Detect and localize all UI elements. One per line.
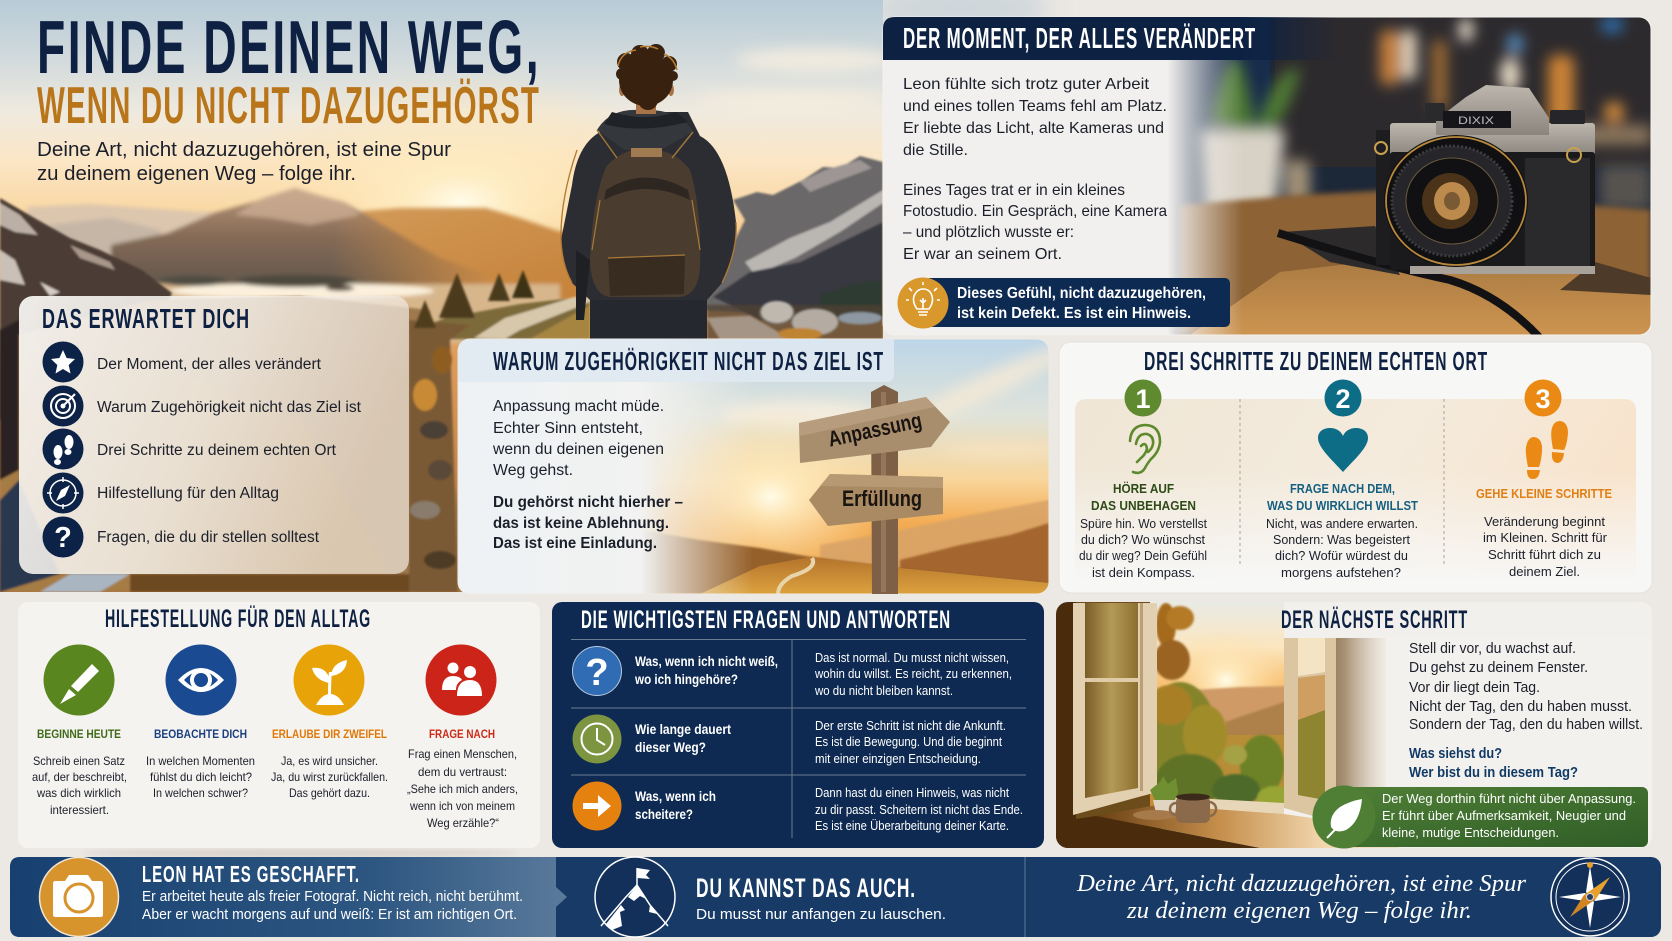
- story text: – und plötzlich wusste er:: [903, 224, 1074, 241]
- body text: [1409, 640, 1643, 781]
- step background: [1075, 399, 1636, 580]
- subtitle: Deine Art, nicht dazuzugehören, ist eine Spur: [37, 138, 451, 161]
- question 1: ?: [585, 652, 609, 694]
- question 1: Das ist normal. Du musst nicht wissen,: [815, 651, 1009, 665]
- panel: der nächste Schritt: [1056, 602, 1652, 848]
- title: WENN DU NICHT DAZUGEHÖRST: [37, 77, 540, 135]
- body text: Du gehörst nicht hierher –: [493, 494, 683, 511]
- tip: beginne heute: BEGINNE HEUTE: [37, 729, 121, 741]
- body text: [492, 398, 683, 552]
- callout: Der Weg dorthin führt nicht über Anpassung.: [1382, 792, 1636, 806]
- callout: Er führt über Aufmerksamkeit, Neugier und: [1382, 809, 1626, 823]
- callout: [1312, 786, 1648, 848]
- icon: mountain with flag: [601, 868, 668, 930]
- footer: Leon hat es geschafft: Er arbeitet heute als freier Fotograf. Nicht reich, nicht berühmt.: [142, 889, 523, 905]
- body text: Das ist eine Einladung.: [493, 535, 657, 552]
- subtitle: [37, 138, 451, 185]
- body text: Stell dir vor, du wachst auf.: [1409, 640, 1576, 657]
- step 3: GEHE KLEINE SCHRITTE: [1476, 486, 1612, 501]
- body text: wenn du deinen eigenen: [492, 441, 664, 458]
- story text: [903, 76, 1167, 263]
- step 3: [1476, 380, 1612, 579]
- question 3: scheitere?: [635, 806, 693, 822]
- body text: Anpassung macht müde.: [493, 398, 664, 415]
- icon: compass: [1551, 858, 1629, 936]
- hiker figure: [561, 44, 736, 339]
- window photo: [1056, 602, 1410, 848]
- panel: Hilfestellung für den Alltag: [18, 602, 540, 848]
- list item: Fragen: Fragen, die du dir stellen solltest: [97, 529, 320, 546]
- heading: DIE WICHTIGSTEN FRAGEN UND ANTWORTEN: [581, 606, 951, 634]
- step 1: HÖRE AUF: [1113, 481, 1174, 496]
- left sash: [1073, 603, 1157, 815]
- step 1: DAS UNBEHAGEN: [1091, 498, 1196, 513]
- signpost: Erfüllung: [842, 486, 922, 511]
- callout: ist kein Defekt. Es ist ein Hinweis.: [957, 305, 1191, 322]
- footer: du kannst das auch: Du musst nur anfangen zu lauschen.: [696, 906, 946, 923]
- tip: frage nach: FRAGE NACH: [429, 729, 495, 741]
- icon: footprints: [1526, 421, 1568, 479]
- header band: [458, 339, 894, 382]
- question 1: wo ich hingehöre?: [634, 671, 738, 687]
- tip: beginne heute: Schreib einen Satz: [33, 754, 125, 768]
- step 1: du dir weg? Dein Gefühl: [1079, 548, 1207, 563]
- heading: DER NÄCHSTE SCHRITT: [1281, 606, 1468, 634]
- tip: beobachte dich: [146, 644, 255, 800]
- tip: erlaube dir zweifel: Ja, es wird unsicher.: [281, 754, 378, 768]
- list item: Hilfestellung: [42, 472, 279, 514]
- question 3: Dann hast du einen Hinweis, was nicht: [815, 786, 1009, 800]
- list item: der Moment: Der Moment, der alles verändert: [97, 356, 322, 373]
- tip: frage nach: Frag einen Menschen,: [408, 747, 517, 761]
- tip: beobachte dich: BEOBACHTE DICH: [154, 729, 247, 741]
- list item: Zugehörigkeit: Warum Zugehörigkeit nicht das Ziel ist: [97, 399, 362, 416]
- story text: und eines tollen Teams fehl am Platz.: [903, 98, 1167, 115]
- body text: Wer bist du in diesem Tag?: [1409, 764, 1578, 781]
- footer: du kannst das auch: DU KANNST DAS AUCH.: [696, 873, 916, 903]
- step 3: Schritt führt dich zu: [1488, 547, 1601, 562]
- story text: die Stille.: [903, 142, 968, 159]
- panel: warum Zugehörigkeit nicht das Ziel ist: [458, 336, 1077, 594]
- camera: DIXIX: [1458, 115, 1495, 127]
- body text: Vor dir liegt dein Tag.: [1409, 679, 1540, 696]
- header band: [883, 17, 1340, 60]
- tip: erlaube dir zweifel: Das gehört dazu.: [289, 786, 370, 800]
- icon: two people: [442, 662, 482, 696]
- list item: drei Schritte: [42, 428, 337, 470]
- icon: pencil: [60, 664, 99, 704]
- icon: arrow: [583, 795, 611, 817]
- callout: Dieses Gefühl, nicht dazuzugehören,: [957, 285, 1206, 302]
- step 2: Sondern: Was begeistert: [1273, 532, 1410, 547]
- footer bar: [10, 857, 1661, 937]
- right sash: [1336, 638, 1386, 803]
- tip: frage nach: wenn ich von meinem: [409, 799, 515, 813]
- body text: Echter Sinn entsteht,: [493, 420, 643, 437]
- icon: leaf: [1327, 799, 1362, 838]
- story text: Fotostudio. Ein Gespräch, eine Kamera: [903, 203, 1167, 220]
- question 1: wo du nicht bleiben kannst.: [814, 684, 953, 698]
- step 2: morgens aufstehen?: [1281, 565, 1401, 580]
- callout: [898, 278, 1230, 328]
- body text: Sondern der Tag, den du haben willst.: [1409, 716, 1643, 733]
- question 2: Es ist die Bewegung. Und die beginnt: [815, 735, 1002, 749]
- tip: frage nach: „Sehe ich mich anders,: [407, 782, 518, 796]
- tip: beobachte dich: In welchen schwer?: [153, 786, 248, 800]
- tip: beginne heute: was dich wirklich: [36, 786, 121, 800]
- panel: der Moment, der alles verändert: [883, 17, 1651, 338]
- question 1: [572, 646, 1012, 698]
- list item: Fragen: ?: [54, 522, 72, 554]
- heading: DER MOMENT, DER ALLES VERÄNDERT: [903, 22, 1256, 55]
- step 3: deinem Ziel.: [1509, 564, 1580, 579]
- question 3: zu dir passt. Scheitern ist nicht das Ende.: [815, 803, 1023, 817]
- footer: du kannst das auch: [595, 857, 946, 937]
- icon: sprout: [312, 660, 347, 705]
- tip: beginne heute: [32, 644, 127, 817]
- icon: heart: [1318, 428, 1368, 472]
- question 2: Wie lange dauert: [635, 721, 731, 737]
- callout: kleine, mutige Entscheidungen.: [1382, 826, 1559, 840]
- hair: [616, 44, 678, 110]
- step 3: im Kleinen. Schritt für: [1483, 530, 1608, 545]
- question 3: [572, 782, 1023, 833]
- body text: Weg gehst.: [493, 462, 573, 479]
- camera photo: [883, 17, 1651, 338]
- list item: drei Schritte: Drei Schritte zu deinem echten Ort: [97, 442, 337, 459]
- icon: camera: [53, 875, 103, 917]
- icon: eye: [178, 668, 224, 692]
- tip: beobachte dich: fühlst du dich leicht?: [150, 770, 252, 784]
- title: [37, 5, 541, 135]
- tip: beginne heute: interessiert.: [50, 803, 109, 817]
- tip: frage nach: [407, 644, 518, 830]
- tip: frage nach: Weg erzähle?“: [427, 816, 499, 830]
- question 2: mit einer einzigen Entscheidung.: [815, 752, 981, 766]
- list item: Fragen: [42, 516, 320, 558]
- step 3: Veränderung beginnt: [1484, 514, 1605, 529]
- body text: Was siehst du?: [1409, 745, 1502, 762]
- subtitle: zu deinem eigenen Weg – folge ihr.: [37, 162, 356, 185]
- question 2: dieser Weg?: [635, 739, 706, 755]
- panel: das erwartet dich: [19, 296, 409, 574]
- icon: ear: [1130, 425, 1160, 473]
- signpost photo: [458, 336, 1077, 594]
- sill: [1096, 805, 1400, 848]
- footer: Leon hat es geschafft: [10, 857, 567, 937]
- camera: [1375, 85, 1595, 274]
- title: FINDE DEINEN WEG,: [37, 5, 541, 89]
- body text: das ist keine Ablehnung.: [493, 515, 669, 532]
- plant and mug: [1133, 776, 1216, 823]
- closing quote: Deine Art, nicht dazuzugehören, ist eine Spur: [1076, 871, 1527, 897]
- step 1: [1079, 380, 1207, 580]
- question 3: Es ist eine Überarbeitung deiner Karte.: [815, 819, 1009, 833]
- heading: WARUM ZUGEHÖRIGKEIT NICHT DAS ZIEL IST: [493, 346, 884, 376]
- list item: Zugehörigkeit: [42, 386, 362, 426]
- question 3: Was, wenn ich: [635, 788, 716, 804]
- inner frame: [1175, 797, 1284, 814]
- step 2: WAS DU WIRKLICH WILLST: [1267, 498, 1418, 513]
- signpost: [799, 385, 950, 594]
- signpost: Anpassung: [826, 407, 924, 452]
- header band: [1284, 602, 1652, 638]
- story text: Leon fühlte sich trotz guter Arbeit: [903, 76, 1150, 93]
- tip: beginne heute: auf, der beschreibt,: [32, 770, 127, 784]
- tip: erlaube dir zweifel: ERLAUBE DIR ZWEIFEL: [272, 729, 387, 741]
- question 2: Der erste Schritt ist nicht die Ankunft.: [815, 719, 1006, 733]
- step 2: FRAGE NACH DEM,: [1290, 481, 1395, 496]
- step 1: du dich? Wo wünschst: [1081, 532, 1205, 547]
- step 2: dich? Wofür würdest du: [1275, 548, 1408, 563]
- step 3: 3: [1535, 384, 1551, 414]
- closing quote: [1076, 871, 1527, 924]
- question 2: [572, 714, 1006, 766]
- question 1: wohin du willst. Es reicht, zu erkennen,: [814, 667, 1012, 681]
- step 2: 2: [1335, 384, 1351, 414]
- heading: das erwartet dich: DAS ERWARTET DICH: [42, 303, 250, 334]
- heading: HILFESTELLUNG FÜR DEN ALLTAG: [105, 604, 371, 633]
- tip: erlaube dir zweifel: [271, 644, 388, 800]
- step 1: ist dein Kompass.: [1092, 565, 1195, 580]
- tip: erlaube dir zweifel: Ja, du wirst zurückfallen.: [271, 770, 388, 784]
- step 2: [1266, 380, 1418, 580]
- list item: der Moment: [42, 342, 322, 382]
- tip: frage nach: dem du vertraust:: [418, 765, 507, 779]
- list item: Hilfestellung: Hilfestellung für den Alltag: [97, 485, 279, 502]
- step 1: Spüre hin. Wo verstellst: [1080, 516, 1207, 531]
- panel: die wichtigsten Fragen und Antworten: [552, 602, 1044, 848]
- hero photo: hiker looking at mountains at sunrise: [0, 0, 895, 592]
- story text: Eines Tages trat er in ein kleines: [903, 182, 1125, 199]
- body text: Nicht der Tag, den du haben musst.: [1409, 698, 1632, 715]
- footer: Leon hat es geschafft: LEON HAT ES GESCHAFFT.: [142, 861, 360, 887]
- body text: Du gehst zu deinem Fenster.: [1409, 659, 1588, 676]
- tip: beobachte dich: In welchen Momenten: [146, 754, 255, 768]
- step 1: 1: [1135, 384, 1151, 414]
- question 1: Was, wenn ich nicht weiß,: [635, 653, 778, 669]
- footer: Leon hat es geschafft: Aber er wacht morgens auf und weiß: Er ist am richtigen Ort.: [142, 907, 517, 923]
- icon: clock: [582, 724, 612, 754]
- panel: drei Schritte zu deinem echten Ort: [1059, 342, 1652, 593]
- step 2: Nicht, was andere erwarten.: [1266, 516, 1418, 531]
- story text: Er liebte das Licht, alte Kameras und: [903, 120, 1164, 137]
- closing quote: zu deinem eigenen Weg – folge ihr.: [1126, 898, 1472, 924]
- icon: lightbulb: [906, 282, 940, 315]
- story text: Er war an seinem Ort.: [903, 246, 1062, 263]
